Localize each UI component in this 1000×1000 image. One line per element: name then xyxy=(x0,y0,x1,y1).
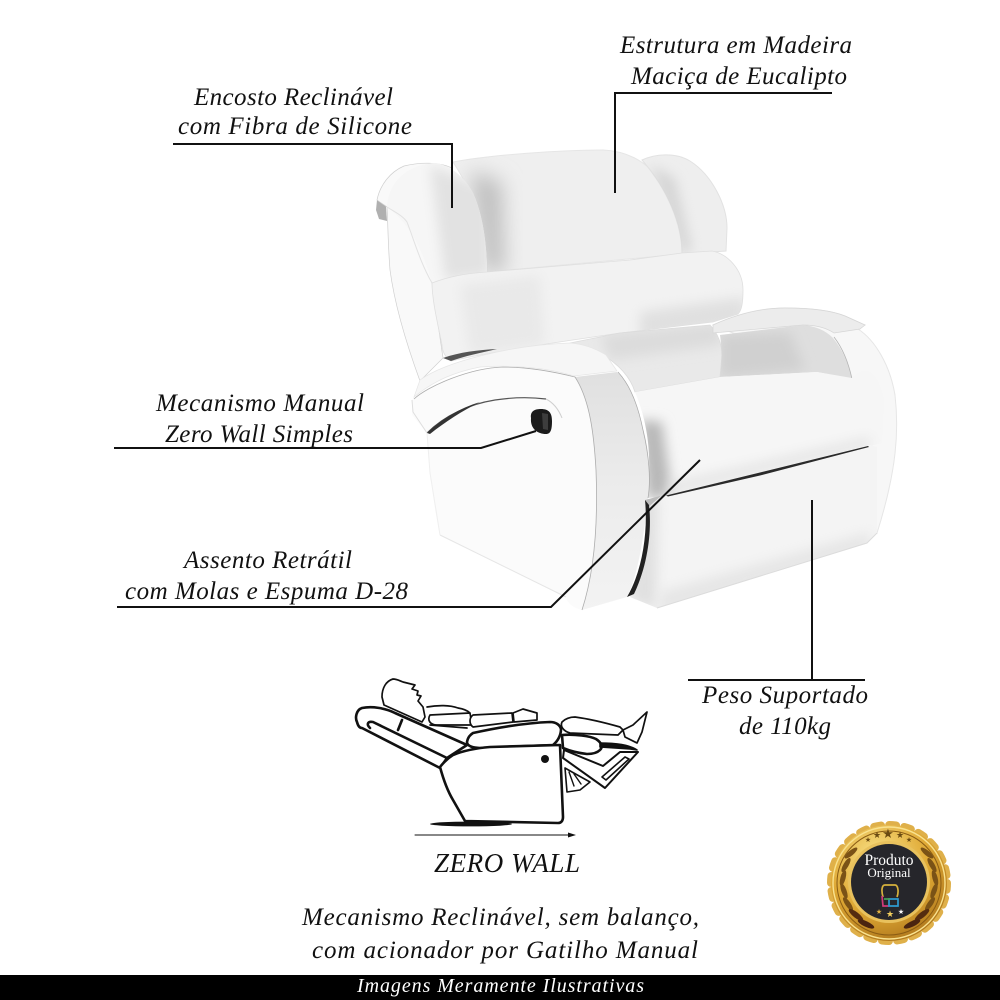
text: Peso Suportado xyxy=(701,682,868,709)
icon: zero wall reclined person diagram xyxy=(356,679,647,838)
badge bottom stars: ★ xyxy=(886,910,894,920)
badge centre xyxy=(848,841,930,923)
text: Assento Retrátil xyxy=(182,547,352,574)
floor shadow xyxy=(430,822,512,826)
callout: estrutura: Maciça de Eucalipto xyxy=(630,63,847,90)
callout: peso: de 110kg xyxy=(739,713,831,740)
badge top stars: ★ xyxy=(896,831,904,841)
text block: mecanismo reclinavel xyxy=(301,904,699,964)
chair: lumbar cushion xyxy=(432,251,745,361)
leader line xyxy=(117,460,700,607)
badge bottom stars xyxy=(876,908,904,920)
text block: mecanismo reclinavel: Mecanismo Reclinável, sem balanço, xyxy=(301,904,699,931)
text: Mecanismo Manual xyxy=(155,390,364,417)
callout: mecanismo: Zero Wall Simples xyxy=(165,421,353,448)
chair: left arm side panel xyxy=(575,372,650,610)
chair: left arm front xyxy=(412,367,597,610)
chair: left wing and outer strip xyxy=(377,163,490,381)
chair: footrest xyxy=(630,445,877,615)
badge bottom stars: ★ xyxy=(876,908,882,916)
text block: mecanismo reclinavel: com acionador por Gatilho Manual xyxy=(312,937,698,964)
chair: right wing xyxy=(642,155,727,255)
callout: encosto xyxy=(173,84,452,208)
person xyxy=(382,679,647,743)
badge: produto original: Produto xyxy=(864,852,914,869)
callout: encosto: com Fibra de Silicone xyxy=(178,113,412,140)
recliner back xyxy=(356,707,467,768)
recliner chair photo xyxy=(376,150,897,615)
badge: produto original xyxy=(831,825,947,941)
leader line xyxy=(688,500,865,680)
laurel leaves xyxy=(838,846,940,930)
heading: zero wall: ZERO WALL xyxy=(434,848,580,878)
badge: produto original: Original xyxy=(867,865,911,880)
chair: main back cushion xyxy=(453,150,682,272)
text: Estrutura em Madeira xyxy=(619,32,852,59)
chair: seat cushion xyxy=(635,371,884,500)
callout: assento: com Molas e Espuma D-28 xyxy=(125,578,408,605)
text: Encosto Reclinável xyxy=(193,84,393,111)
leader line xyxy=(615,93,832,193)
footer bar: Imagens Meramente Ilustrativas xyxy=(356,975,644,997)
badge bottom stars: ★ xyxy=(898,908,904,916)
footer bar xyxy=(0,975,1000,1000)
chair: left arm top xyxy=(414,343,617,397)
leader line xyxy=(114,431,536,448)
rear headrest grey tab xyxy=(376,197,387,221)
badge chair logo xyxy=(882,885,898,906)
callout: peso xyxy=(688,500,868,740)
chair: lower back cushion xyxy=(570,322,722,392)
direction arrow xyxy=(415,834,574,836)
chair: right arm xyxy=(713,308,897,533)
badge top stars: ★ xyxy=(865,836,871,844)
recliner footrest xyxy=(563,750,638,792)
badge top stars xyxy=(865,827,912,844)
body lever xyxy=(541,755,549,763)
callout: assento xyxy=(117,460,700,607)
callout: estrutura xyxy=(615,32,852,193)
callout: mecanismo xyxy=(114,390,536,448)
dark gap between arm and footrest xyxy=(627,500,650,597)
badge top stars: ★ xyxy=(873,831,881,841)
lever handle xyxy=(531,409,552,434)
leader line xyxy=(173,144,452,208)
recliner body xyxy=(440,745,563,823)
recliner seat cushions xyxy=(467,722,637,754)
badge top stars: ★ xyxy=(906,836,912,844)
badge top stars: ★ xyxy=(882,827,894,842)
